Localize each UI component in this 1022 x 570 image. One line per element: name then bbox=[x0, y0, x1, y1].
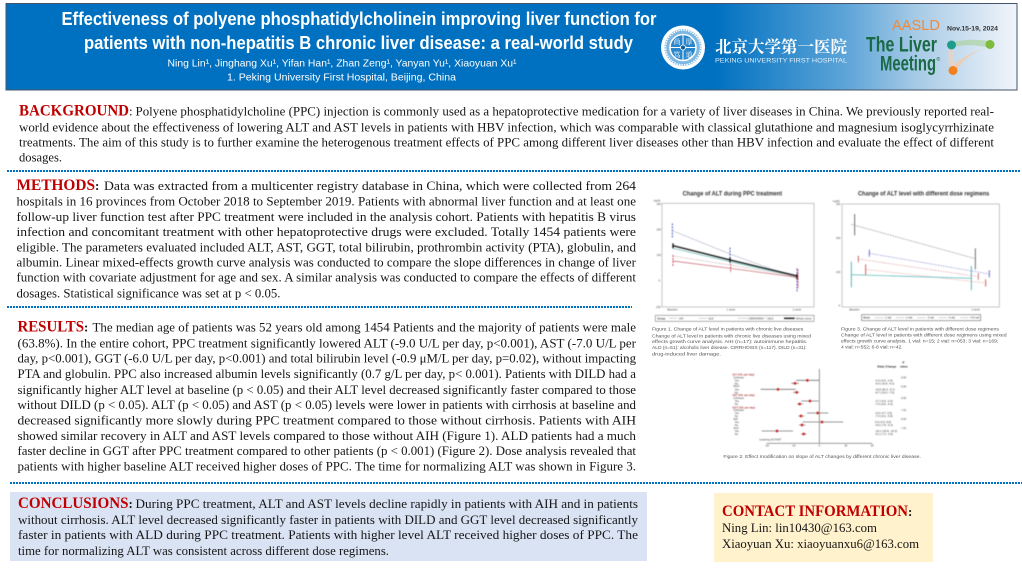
chart: figure 2 forest plot: GGT (U/L per day) bbox=[732, 405, 755, 409]
title: patients with non-hepatitis B chronic liver disease: a real-world study bbox=[84, 32, 634, 53]
chart: figure 1 change of ALT during PPC treatment: 0 bbox=[659, 279, 661, 283]
caption: figure 1: Figure 1. Change of ALT level in patients with chronic live diseases bbox=[652, 327, 804, 333]
chart: figure 2 forest plot: 0.9 (-6.5, 8.9) bbox=[875, 420, 891, 424]
chart: figure 2 forest plot: Yes bbox=[735, 420, 740, 424]
chart: figure 2 forest plot: 0.03 bbox=[901, 396, 907, 400]
chart: figure 2 forest plot: -3.7 (-6.9, -0.4) bbox=[875, 399, 893, 403]
results text: faster decline in GGT after PPC treatment compared to other patients (p < 0.001) (Figure 2). Dose analysis revealed that bbox=[18, 443, 636, 458]
chart: figure 3 change of ALT level with different dose regimens: 1 vial bbox=[885, 316, 892, 320]
chart: figure 3 change of ALT level with different dose regimens: mg/dL bbox=[833, 199, 841, 203]
icon: university seal: 笃 bbox=[674, 50, 680, 60]
results text: patients with higher baseline ALT received higher doses of PPC. The time for normalizing ALT was shown in Figure 3. bbox=[18, 458, 636, 474]
methods text: : bbox=[95, 178, 99, 193]
chart: figure 2 forest plot: No bbox=[735, 423, 739, 427]
chart: figure 2 forest plot: Lowering ALT/AST bbox=[759, 438, 782, 442]
results text: showed similar recovery in ALT and AST levels compared to those without AIH (Figure 1). ALD patients had a much bbox=[18, 428, 636, 443]
chart: figure 2 forest plot: No bbox=[735, 414, 739, 418]
results text: day, p<0.001), GGT (-6.0 U/L per day, p<0.001) and total bilirubin level (-0.9 μM/L per day, p=0.02), without impacting bbox=[18, 350, 636, 366]
affiliation: 1. Peking University First Hospital, Beijing, China bbox=[227, 72, 456, 84]
chart: figure 2 forest plot: 0.04 bbox=[901, 375, 907, 379]
background text: treatments. The aim of this study is to further examine the heterogenous treatment effects of PPC among different liver diseases other than HBV infection and evaluate the effect of different bbox=[19, 134, 994, 150]
chart: figure 3 change of ALT level with different dose regimens: 200 bbox=[836, 236, 841, 240]
conclusions text: faster in patients with ALD during PPC treatment. Patients with higher level ALT received higher doses of PPC. The bbox=[18, 527, 638, 542]
chart: figure 2 forest plot: -7.0 (-8.2, -5.8) bbox=[875, 414, 893, 418]
chart: figure 1 change of ALT during PPC treatment: Group bbox=[657, 316, 666, 320]
title: Effectiveness of polyene phosphatidylcholinein improving liver function for bbox=[62, 8, 656, 29]
caption: figure 1: Change of ALT level in patients with chronic live diseases using mixed bbox=[652, 333, 811, 339]
heading: results: RESULTS bbox=[18, 319, 84, 336]
chart: figure 1 change of ALT during PPC treatment: Whole cohort bbox=[796, 316, 812, 320]
chart: figure 2 forest plot: 20 bbox=[871, 444, 874, 448]
results text: The median age of patients was 52 years old among 1454 Patients and the majority of patients were male bbox=[92, 320, 636, 335]
icon: university seal: 道 bbox=[686, 50, 692, 60]
results text: : bbox=[84, 320, 88, 335]
methods text: follow-up liver function test after PPC treatment were included in the analysis cohort. Patients with hepatitis B virus bbox=[16, 209, 636, 224]
results text: decreased significantly more slowly during PPC treatment compared to those without cirrhosis. Patients with AIH bbox=[18, 412, 636, 428]
chart: figure 2 forest plot: 0.04 bbox=[901, 417, 907, 421]
panel: background bbox=[19, 103, 994, 164]
results text bbox=[18, 320, 637, 474]
chart: figure 2 forest plot: -6.6 (-7.8, -5.3) bbox=[875, 423, 893, 427]
caption: figure 1 bbox=[652, 327, 811, 357]
chart: figure 1 change of ALT during PPC treatment: mg/dL bbox=[653, 199, 661, 203]
chart: figure 2 forest plot: Cirrhosis bbox=[733, 396, 744, 400]
chart: figure 2 forest plot: <.01 bbox=[901, 426, 907, 430]
chart: figure 1 change of ALT during PPC treatment: -100 bbox=[655, 305, 661, 309]
background text bbox=[19, 104, 994, 164]
chart: figure 1 change of ALT during PPC treatment: 2 week bbox=[793, 308, 802, 312]
chart: figure 2 forest plot: ALT (U/L per day) bbox=[732, 373, 754, 377]
chart: figure 1 change of ALT during PPC treatment: Change of ALT during PPC treatment bbox=[683, 191, 782, 197]
chart: figure 2 forest plot: No bbox=[735, 390, 739, 394]
chart: figure 3 change of ALT level with different dose regimens: 0 bbox=[839, 304, 841, 308]
contact details: Ning Lin: lin10430@163.com bbox=[722, 520, 877, 535]
icon: university seal: 尚 bbox=[674, 37, 680, 47]
contact details: Xiaoyuan Xu: xiaoyuanxu6@163.com bbox=[722, 536, 919, 551]
conclusions text bbox=[18, 496, 638, 558]
results text: (63.8%). In the entire cohort, PPC treatment significantly lowered ALT (-9.0 U/L per day, p<0.001), AST (-7.0 U/L per bbox=[18, 336, 637, 350]
methods text bbox=[16, 178, 637, 300]
chart: figure 3 change of ALT level with different dose regimens: 6-8 vial bbox=[971, 316, 980, 320]
chart: figure 2 forest plot: Yes bbox=[735, 387, 740, 391]
methods text: Data was extracted from a multicenter registry database in China, which were collected from 264 bbox=[104, 178, 637, 193]
chart: figure 1 change of ALT during PPC treatment: CIRRHOSIS bbox=[748, 316, 763, 320]
contact details bbox=[722, 504, 919, 551]
chart: figure 3 change of ALT level with different dose regimens: 4 vial bbox=[949, 316, 955, 320]
caption: figure 3: Change of ALT level in patients with different dose regimens using mixed bbox=[841, 333, 1007, 339]
caption: figure 3: effects growth curve analysis. 1 vial: n=15; 2 vial: n=053; 3 vial: n=169; bbox=[841, 339, 998, 345]
chart: figure 1 change of ALT during PPC treatment: ALD bbox=[708, 316, 714, 320]
chart: figure 3 change of ALT level with different dose regimens bbox=[833, 191, 1007, 351]
panel: conclusions bbox=[10, 492, 647, 561]
chart: figure 2 forest plot: 0 bbox=[819, 444, 821, 448]
caption: figure 1: ALD (n=51): alcoholic liver disease. CIRRHOSIS (n=117). DILD (n=31): bbox=[652, 345, 807, 351]
chart: figure 2 forest plot: Daily Change bbox=[877, 365, 897, 369]
chart: figure 2 forest plot: -9.5 (-10.8, -8.1) bbox=[875, 381, 894, 385]
chart: figure 1 change of ALT during PPC treatment: 1 week bbox=[727, 308, 736, 312]
conference logo: The Liver bbox=[866, 34, 937, 56]
methods text: function with covariate adjustment for age and sex. A similar analysis was conducted to compare the effects of different bbox=[16, 270, 636, 284]
caption: figure 1: effects growth curve analysis. AIH (n=17): autoimmune hepatitis. bbox=[652, 339, 807, 345]
background text: Polyene phosphatidylcholine (PPC) injection is commonly used as a hepatoprotective medication for a variety of liver diseases in China. We previously reported real- bbox=[136, 104, 994, 119]
chart: figure 2 forest plot: No bbox=[735, 432, 739, 436]
chart: figure 1 change of ALT during PPC treatment: 300 bbox=[657, 202, 662, 206]
chart: figure 2 forest plot: ALD bbox=[733, 426, 739, 430]
panel: contact information bbox=[714, 493, 933, 562]
methods text: infection and concomitant treatment with other hepatoprotective drugs were excluded. Totally 1454 patients were bbox=[16, 224, 636, 239]
caption: figure 3 bbox=[841, 327, 1007, 351]
icon: university seal: 厚 bbox=[686, 37, 692, 47]
chart: figure 2 forest plot: <.01 bbox=[901, 408, 907, 412]
chart: figure 1 change of ALT during PPC treatment: Baseline bbox=[667, 308, 678, 312]
chart: figure 3 change of ALT level with different dose regimens: 300 bbox=[836, 202, 841, 206]
heading: contact information: CONTACT INFORMATION bbox=[722, 503, 908, 520]
chart: figure 1 change of ALT during PPC treatment: DILD bbox=[767, 316, 773, 320]
chart: figure 2 forest plot: -0.6 (-4.7, 3.5) bbox=[875, 411, 892, 415]
hospital name: 北京大学第一医院 bbox=[715, 34, 848, 58]
results text: significantly higher ALT level at baseline (p < 0.05) and their ALT level decreased significantly faster compared to those bbox=[18, 382, 636, 397]
background text: : bbox=[129, 104, 133, 119]
caption: figure 3: 4 vial: n=552; 6-8 vial: n=42. bbox=[841, 345, 903, 351]
icon: university seal bbox=[661, 26, 705, 70]
conclusions text: : bbox=[128, 496, 133, 511]
background text: dosages. bbox=[19, 150, 62, 164]
chart: figure 2 forest plot: 10 bbox=[844, 444, 848, 448]
chart: figure 2 forest plot: No bbox=[735, 402, 739, 406]
chart: figure 1 change of ALT during PPC treatment bbox=[652, 191, 814, 357]
methods text: dosages. Statistical significance was set at p < 0.05. bbox=[16, 286, 280, 300]
conference logo: ® bbox=[936, 56, 940, 63]
chart: figure 3 change of ALT level with different dose regimens: 100 bbox=[836, 270, 841, 274]
chart: figure 2 forest plot: -4.4 (-8.3, -0.4) bbox=[875, 378, 893, 382]
caption: figure 3: Figure 3. Change of ALT level in patients with different dose regimens bbox=[841, 327, 1000, 333]
chart: figure 2 forest plot: Yes bbox=[735, 378, 740, 382]
header banner bbox=[6, 4, 1017, 90]
chart: figure 2 forest plot: Cirrhosis bbox=[733, 375, 744, 379]
caption: figure 2: Figure 2. Effect modification on slope of ALT changes by different chronic liver disease. bbox=[723, 454, 921, 460]
title bbox=[62, 8, 656, 53]
chart: figure 1 change of ALT during PPC treatment: 100 bbox=[657, 253, 662, 257]
chart: figure 2 forest plot: P bbox=[902, 361, 904, 365]
chart: figure 2 forest plot: Yes bbox=[735, 429, 740, 433]
conclusions text: During PPC treatment, ALT and AST levels decline rapidly in patients with AIH and in patients bbox=[136, 496, 638, 511]
chart: figure 2 forest plot: -20 bbox=[765, 444, 769, 448]
conclusions text: time for normalizing ALT was consistent across different dose regimens. bbox=[18, 543, 389, 558]
chart: figure 3 change of ALT level with different dose regimens: 1 week bbox=[971, 308, 980, 312]
chart: figure 2 forest plot: Yes bbox=[735, 411, 740, 415]
methods text: hospitals in 16 provinces from October 2018 to September 2019. Patients with abnormal liver function and at least one bbox=[16, 194, 636, 208]
chart: figure 2 forest plot: -13.5 (20.3, -6.7) bbox=[875, 387, 895, 391]
panel: results bbox=[18, 319, 637, 474]
heading: background: BACKGROUND bbox=[19, 103, 129, 120]
results text: without DILD (p < 0.05). ALT (p < 0.05) and AST (p < 0.05) levels were lower in patients with cirrhosis at baseline and bbox=[18, 397, 636, 412]
chart: figure 2 forest plot: DILD bbox=[733, 384, 739, 388]
heading: methods: METHODS bbox=[16, 177, 95, 194]
chart: figure 2 forest plot: value bbox=[900, 365, 908, 369]
contact details: : bbox=[908, 504, 912, 519]
chart: figure 2 forest plot: AST (U/L per day) bbox=[732, 393, 755, 397]
chart: figure 2 forest plot: Cirrhosis bbox=[733, 408, 744, 412]
background text: world evidence about the effectiveness of lowering ALT and AST levels in patients with HBV infection, which was comparable with classical glutathione and magnesium isoglycyrrhizinate bbox=[19, 120, 994, 134]
chart: figure 2 forest plot: -16.1 (-20.8, -10.0) bbox=[875, 429, 897, 433]
chart: figure 1 change of ALT during PPC treatment: AIH bbox=[679, 316, 684, 320]
chart: figure 2 forest plot: No bbox=[735, 381, 739, 385]
hospital name: PEKING UNIVERSITY FIRST HOSPITAL bbox=[715, 58, 847, 64]
chart: figure 2 forest plot: AIH bbox=[733, 417, 738, 421]
panel: methods bbox=[16, 177, 637, 300]
chart: figure 3 change of ALT level with different dose regimens: Baseline bbox=[849, 308, 860, 312]
conference logo: Meeting bbox=[880, 52, 936, 76]
conference logo: Nov.15-19, 2024 bbox=[947, 26, 998, 32]
chart: figure 3 change of ALT level with different dose regimens: Change of ALT level with different dose regimens bbox=[858, 191, 990, 197]
chart: figure 2 forest plot: -10 bbox=[792, 444, 796, 448]
chart: figure 3 change of ALT level with different dose regimens: Dose bbox=[863, 316, 870, 320]
chart: figure 2 forest plot: 0.04 bbox=[901, 384, 907, 388]
conference logo: AASLD bbox=[892, 18, 940, 34]
methods text: eligible. The parameters evaluated included ALT, AST, GGT, total bilirubin, prothrombin activity (PTA), globulin, and bbox=[16, 240, 636, 254]
conclusions text: without cirrhosis. ALT level decreased significantly faster in patients with DILD and GGT level decreased significantly bbox=[18, 512, 638, 527]
results text: PTA and globulin. PPC also increased albumin levels significantly (0.7 g/L per day, p< 0.001). Patients with DILD had a bbox=[18, 366, 636, 381]
chart: figure 2 forest plot: Yes bbox=[735, 399, 740, 403]
chart: figure 3 change of ALT level with different dose regimens: 2 vial bbox=[906, 316, 913, 320]
chart: figure 1 change of ALT during PPC treatment: 200 bbox=[657, 227, 662, 231]
conference logo bbox=[866, 18, 998, 76]
chart: figure 2 forest plot: -8.7 (-10.0, -7.5) bbox=[875, 390, 894, 394]
caption: figure 1: drug-induced liver damage. bbox=[652, 351, 721, 357]
chart: figure 2 forest plot bbox=[723, 361, 921, 460]
heading: conclusions: CONCLUSIONS bbox=[18, 495, 129, 512]
methods text: albumin. Linear mixed-effects growth curve analysis was conducted to compare the slope differences in change of liver bbox=[16, 254, 637, 270]
chart: figure 2 forest plot: -7.5 (-8.6, -6.4) bbox=[875, 402, 893, 406]
chart: figure 3 change of ALT level with different dose regimens: 3 vial bbox=[928, 316, 934, 320]
authors: Ning Lin¹, Jinghang Xu¹, Yifan Han¹, Zhan Zeng¹, Yanyan Yu¹, Xiaoyuan Xu¹ bbox=[168, 58, 517, 70]
chart: figure 2 forest plot: -6.1 (-7.3, -4.9) bbox=[875, 432, 893, 436]
